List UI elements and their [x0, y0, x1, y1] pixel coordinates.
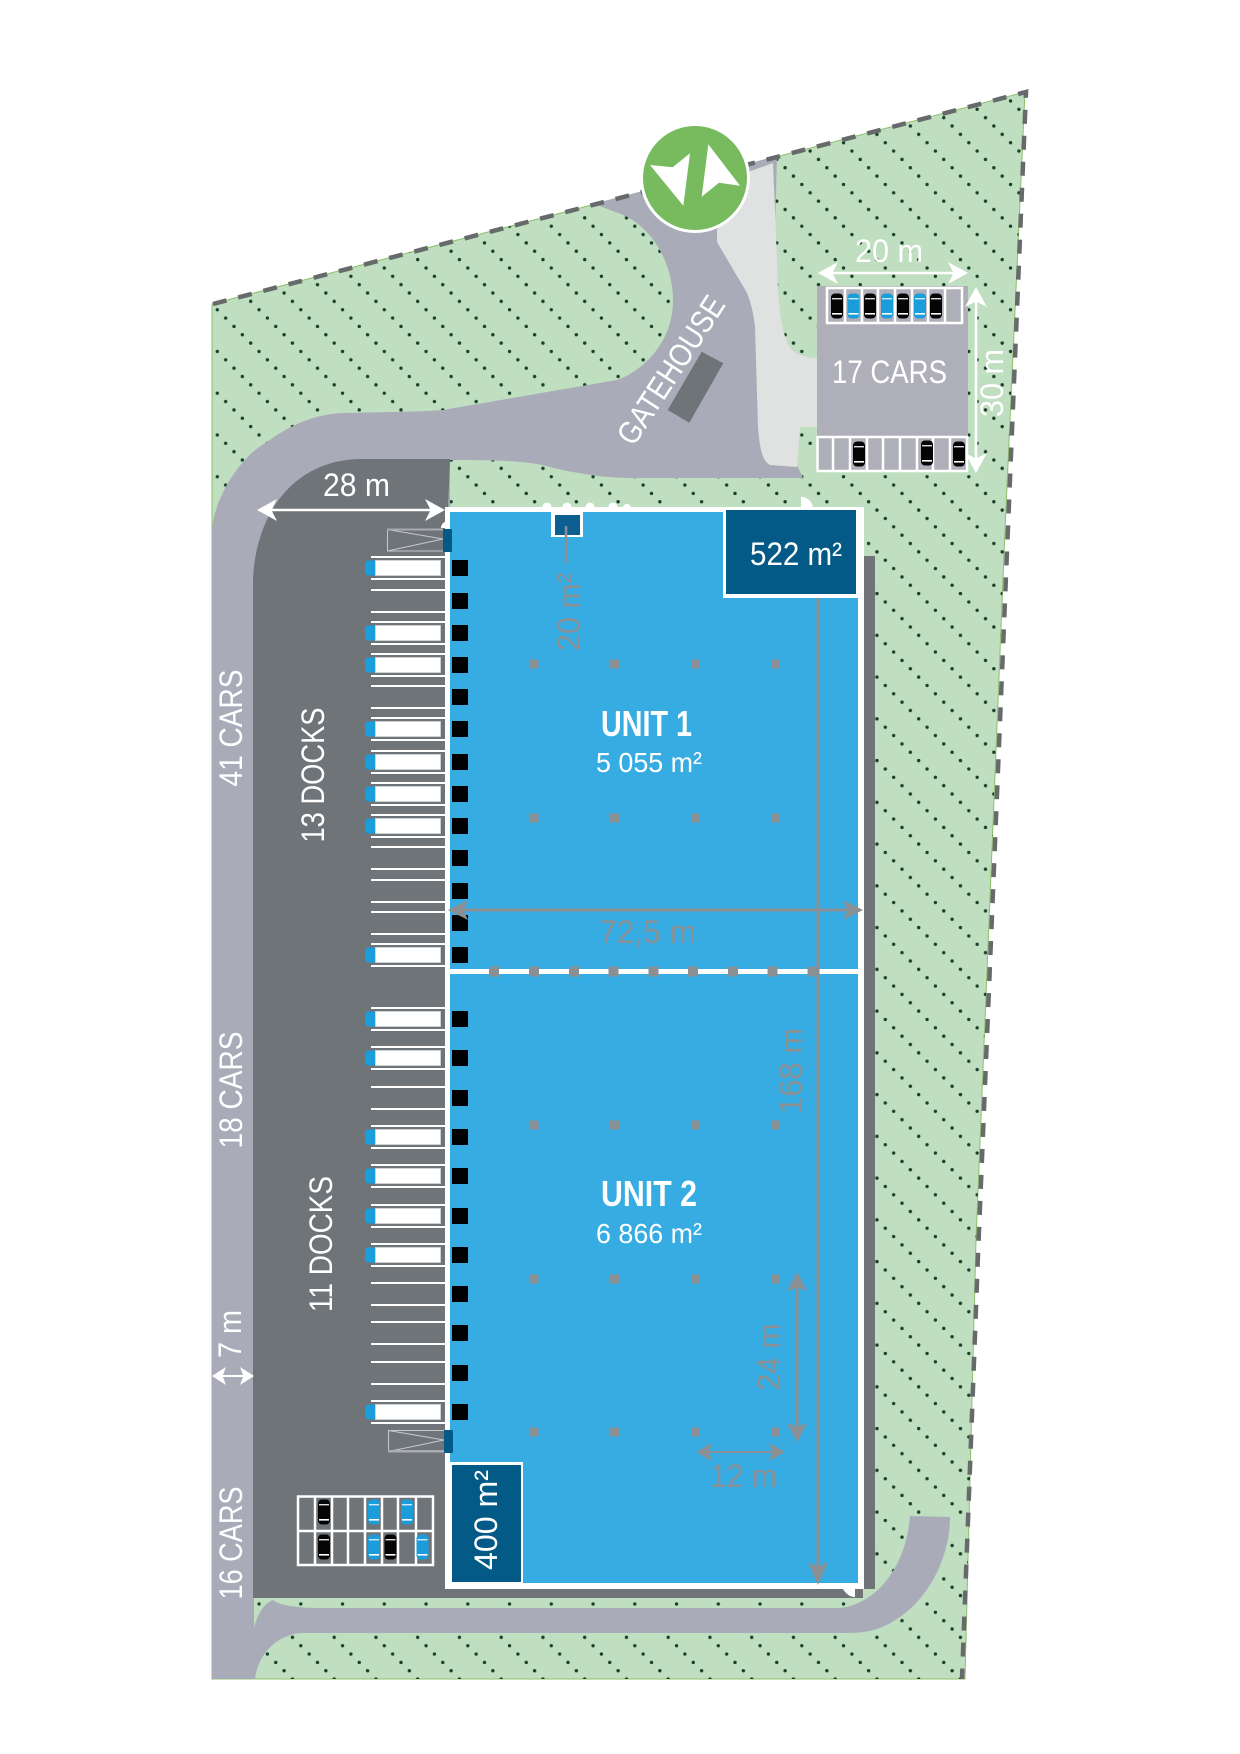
label: gatehouse: GATEHOUSE	[609, 289, 732, 451]
dock bays: unit 1	[365, 557, 445, 966]
office: 400 m2	[450, 1462, 523, 1588]
label: 13 docks: 13 DOCKS	[295, 708, 331, 842]
car park: 17 cars	[817, 286, 968, 472]
access road	[212, 156, 803, 1679]
structural columns	[489, 660, 818, 1436]
unit 2 label: UNIT 2	[601, 1173, 697, 1214]
dimension: 7 m: 7 m	[212, 1310, 248, 1358]
dimension: 20 m	[818, 233, 968, 284]
dock doors: unit 1	[452, 560, 468, 963]
dimension: 72,5 m	[448, 900, 863, 950]
bottom service road	[212, 1516, 950, 1679]
pedestrian path	[717, 163, 817, 467]
office: 400 m2: 400 m²	[468, 1470, 504, 1570]
dimension: 30 m	[965, 287, 1010, 473]
dimension: 20 m: 20 m	[855, 233, 923, 269]
gatehouse building	[668, 352, 723, 423]
unit 2 floor	[450, 974, 858, 1583]
label: 11 docks: 11 DOCKS	[303, 1176, 339, 1312]
bottom parking stalls	[818, 437, 967, 471]
building outline bumps	[441, 497, 855, 1597]
dimension: 24 m: 24 m	[751, 1324, 787, 1390]
unit 1 label	[596, 703, 702, 778]
unit 1 label: 5 055 m²	[596, 747, 702, 778]
dimension: 28 m: 28 m	[323, 467, 390, 503]
ramp: bottom	[388, 1430, 453, 1453]
icon: north arrow	[642, 124, 748, 232]
dimension: 30 m: 30 m	[974, 349, 1010, 417]
small office: 20 m2	[551, 512, 587, 651]
dock doors: unit 2	[452, 1011, 468, 1420]
building	[445, 507, 864, 1589]
unit 2 label: 6 866 m²	[596, 1218, 702, 1249]
site boundary	[213, 92, 1026, 1679]
unit 1 floor	[450, 512, 858, 969]
dimension: 12 m	[696, 1443, 785, 1494]
dimension: 168 m	[773, 598, 828, 1585]
dimension: 12 m: 12 m	[710, 1458, 777, 1494]
dimension: 168 m: 168 m	[773, 1028, 809, 1114]
label: 18 cars: 18 CARS	[213, 1032, 249, 1148]
small office: 20 m2: 20 m²	[551, 573, 587, 651]
unit 1 label: UNIT 1	[601, 703, 692, 744]
dimension: 24 m	[751, 1272, 807, 1442]
office: 522 m2	[723, 507, 863, 598]
ramp: top	[387, 528, 452, 552]
top parking stalls	[827, 288, 962, 323]
office: 522 m2: 522 m²	[750, 536, 842, 572]
car park: yard	[298, 1496, 433, 1565]
label: 17 cars: 17 CARS	[832, 354, 947, 390]
dimension: 72,5 m: 72,5 m	[599, 914, 696, 950]
unit 2 label	[596, 1173, 702, 1249]
dock bays: unit 2	[365, 1008, 445, 1423]
label: 41 cars: 41 CARS	[213, 670, 249, 786]
landscaped site area	[212, 92, 1025, 1679]
truck yard	[253, 459, 875, 1598]
dimension: 7 m	[212, 1310, 254, 1385]
label: 16 cars: 16 CARS	[213, 1486, 249, 1600]
dimension: 28 m	[257, 467, 445, 521]
